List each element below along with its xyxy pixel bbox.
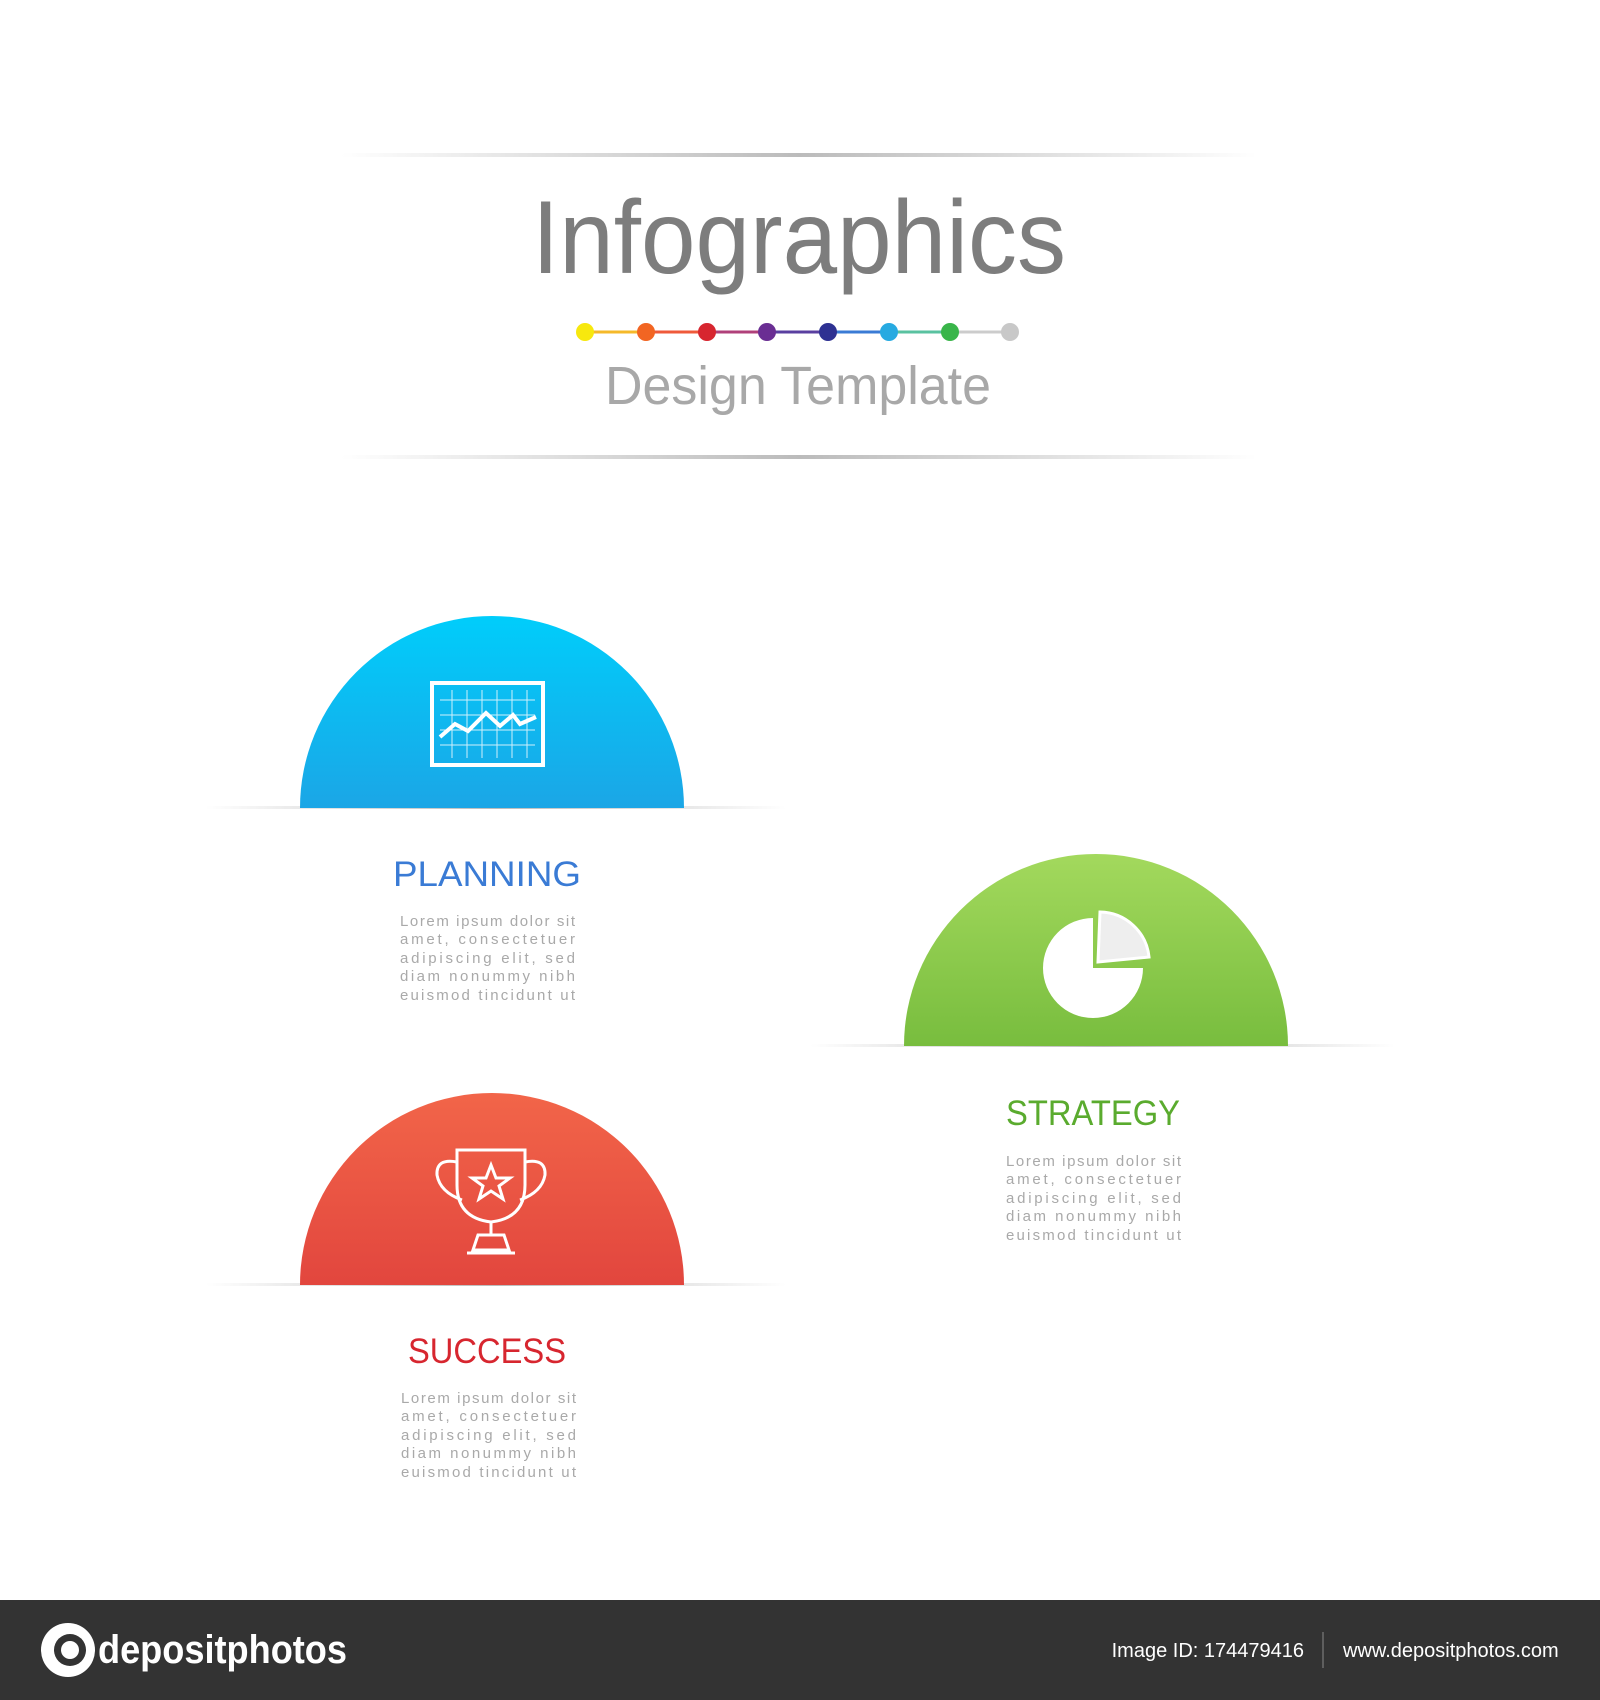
- body text: strategy: amet, consectetuer: [1006, 1171, 1181, 1188]
- heading: planning: PLANNING: [393, 855, 581, 894]
- body text: strategy: [1006, 1153, 1182, 1244]
- icon: trophy: [437, 1150, 545, 1253]
- icon: pie chart: [1043, 912, 1149, 1018]
- heading: success: SUCCESS: [408, 1332, 566, 1371]
- icon: camera logo: [41, 1623, 95, 1677]
- title: Infographics: [532, 180, 1066, 296]
- color dots line: [576, 323, 1019, 341]
- body text: planning: [400, 913, 576, 1004]
- logo text: depositphotos: [98, 1628, 347, 1672]
- header: [341, 153, 1257, 459]
- body text: success: euismod tincidunt ut: [401, 1464, 577, 1481]
- body text: strategy: Lorem ipsum dolor sit: [1006, 1153, 1182, 1170]
- heading: strategy: STRATEGY: [1006, 1094, 1180, 1133]
- website: www.depositphotos.com: [1342, 1640, 1559, 1662]
- body text: success: amet, consectetuer: [401, 1408, 576, 1425]
- body text: strategy: adipiscing elit, sed: [1006, 1190, 1181, 1207]
- panel: success: [206, 1093, 786, 1481]
- body text: success: diam nonummy nibh: [401, 1445, 576, 1462]
- body text: planning: euismod tincidunt ut: [400, 987, 576, 1004]
- body text: planning: Lorem ipsum dolor sit: [400, 913, 576, 930]
- body text: strategy: euismod tincidunt ut: [1006, 1227, 1182, 1244]
- panel: strategy: [810, 854, 1395, 1244]
- body text: planning: adipiscing elit, sed: [400, 950, 575, 967]
- panel: planning: [206, 616, 786, 1004]
- body text: planning: amet, consectetuer: [400, 931, 575, 948]
- body text: strategy: diam nonummy nibh: [1006, 1208, 1181, 1225]
- body text: planning: diam nonummy nibh: [400, 968, 575, 985]
- footer bar: [0, 1600, 1600, 1700]
- image id: Image ID: 174479416: [1112, 1640, 1304, 1662]
- body text: success: [401, 1390, 577, 1481]
- subtitle: Design Template: [605, 356, 991, 416]
- body text: success: adipiscing elit, sed: [401, 1427, 576, 1444]
- icon: chart board: [432, 683, 543, 765]
- body text: success: Lorem ipsum dolor sit: [401, 1390, 577, 1407]
